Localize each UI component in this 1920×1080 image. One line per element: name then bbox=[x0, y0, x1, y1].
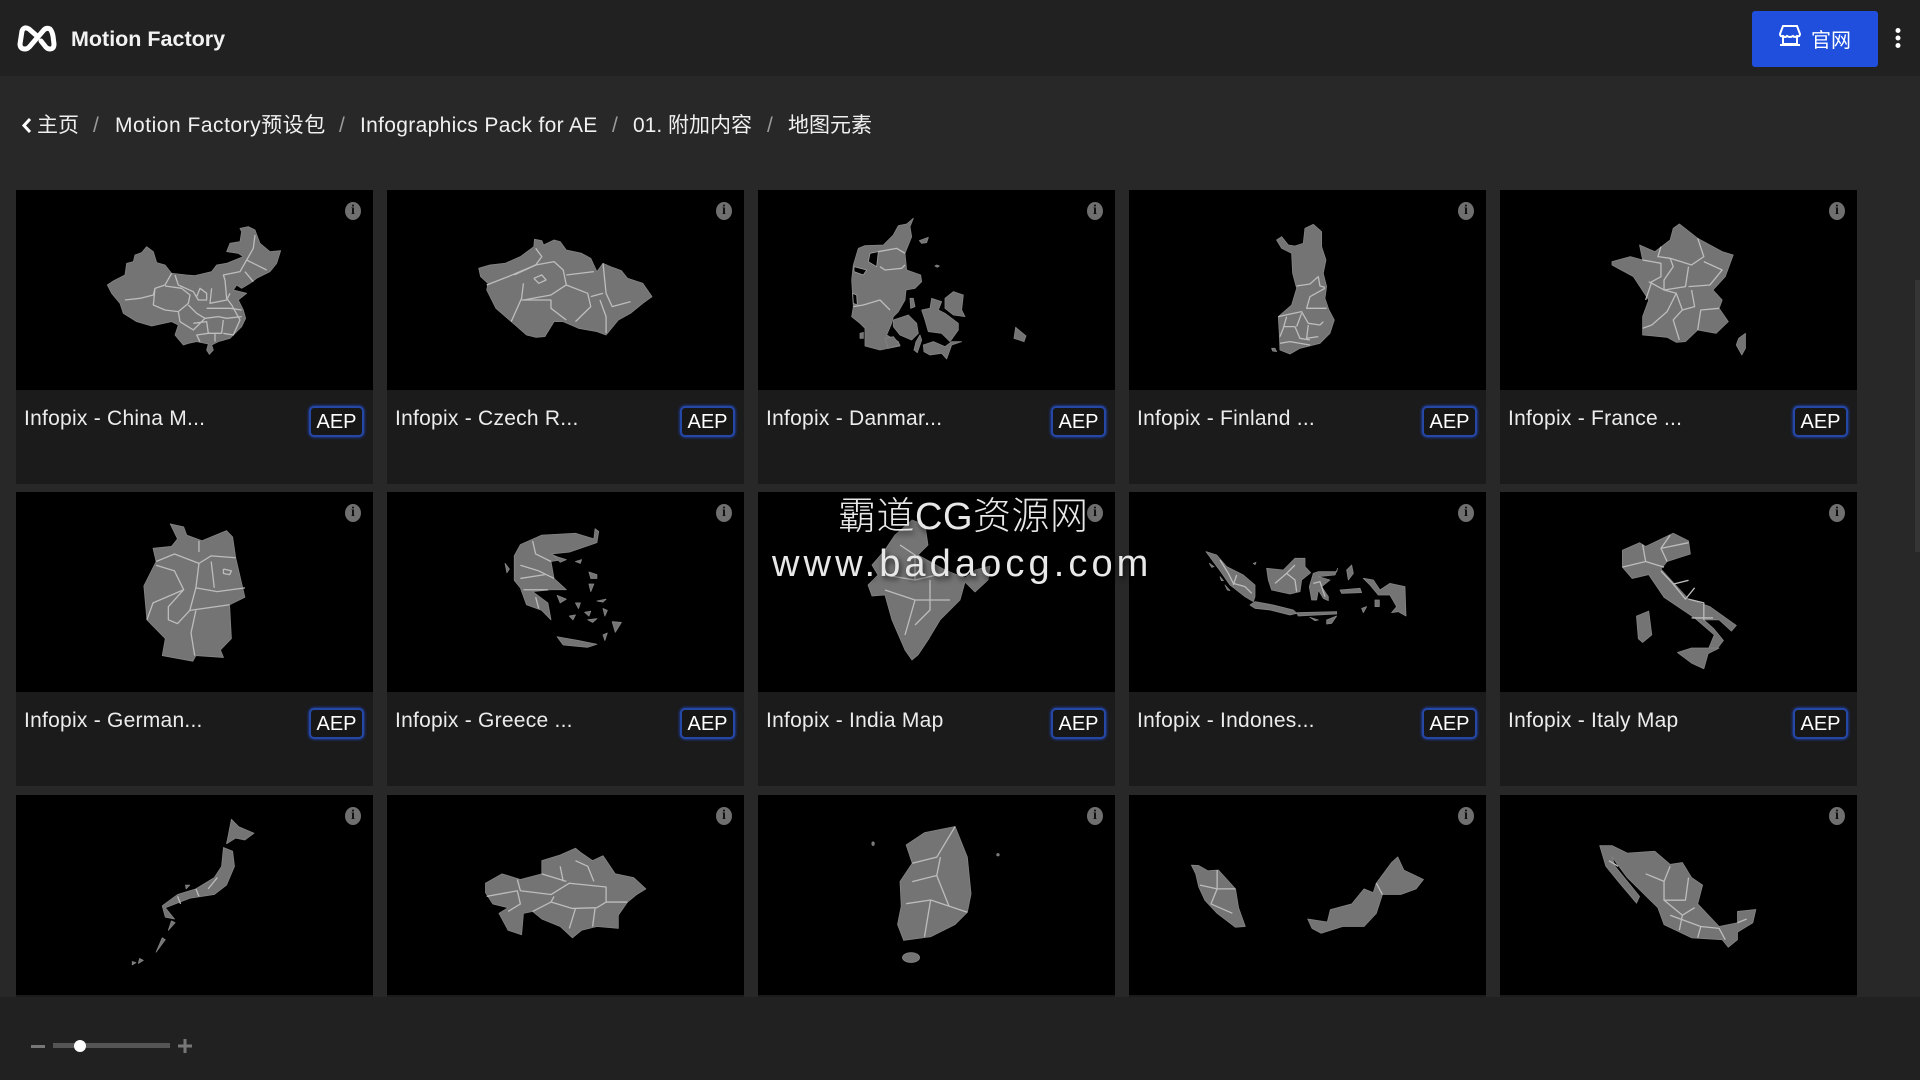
breadcrumb items: / bbox=[93, 114, 99, 137]
icon: info bbox=[1829, 504, 1845, 522]
icon: info: i bbox=[722, 203, 726, 218]
icon: info bbox=[345, 202, 361, 220]
badge: AEP: AEP bbox=[316, 411, 357, 433]
breadcrumb items: / bbox=[612, 114, 618, 137]
badge: AEP: AEP bbox=[1429, 411, 1470, 433]
icon: info: i bbox=[722, 505, 726, 520]
icon: info bbox=[1458, 202, 1474, 220]
breadcrumb navigation bbox=[22, 114, 872, 137]
map: Italy bbox=[1500, 492, 1857, 692]
watermark line: url: www.badaocg.com bbox=[772, 543, 1152, 585]
icon: info: i bbox=[722, 808, 726, 823]
slider thumb bbox=[74, 1040, 86, 1052]
icon: info bbox=[1829, 807, 1845, 825]
scrollbar bbox=[1915, 280, 1920, 552]
badge: AEP: AEP bbox=[687, 713, 728, 735]
card: Malaysia bbox=[1129, 795, 1486, 997]
watermark bbox=[772, 496, 1152, 585]
map: Malaysia bbox=[1129, 795, 1486, 995]
icon: info bbox=[345, 504, 361, 522]
icon: info bbox=[716, 807, 732, 825]
icon: more menu dots bbox=[1896, 28, 1900, 48]
breadcrumb items: 地图元素 bbox=[788, 114, 872, 137]
map: Kazakhstan bbox=[387, 795, 744, 995]
card title: Infopix - Danmar... bbox=[766, 407, 942, 430]
badge: AEP: AEP bbox=[316, 713, 357, 735]
badge: AEP: AEP bbox=[1800, 713, 1841, 735]
badge: AEP bbox=[1051, 708, 1106, 739]
icon: info bbox=[716, 202, 732, 220]
card: Kazakhstan bbox=[387, 795, 744, 997]
map: India bbox=[758, 492, 1115, 692]
icon: info: i bbox=[1093, 808, 1097, 823]
map: France bbox=[1500, 190, 1857, 390]
badge: AEP bbox=[309, 708, 364, 739]
badge: AEP: AEP bbox=[1058, 411, 1099, 433]
breadcrumb items: / bbox=[767, 114, 773, 137]
icon: info: i bbox=[351, 203, 355, 218]
card title: Infopix - France ... bbox=[1508, 407, 1682, 430]
icon: info: i bbox=[1464, 203, 1468, 218]
icon: info: i bbox=[351, 808, 355, 823]
icon: info: i bbox=[351, 505, 355, 520]
map: Mexico bbox=[1500, 795, 1857, 995]
card title: Infopix - German... bbox=[24, 709, 203, 732]
card: China bbox=[16, 190, 373, 484]
badge: AEP bbox=[680, 406, 735, 437]
badge: AEP bbox=[309, 406, 364, 437]
map: Greece bbox=[387, 492, 744, 692]
card: Czech Republic bbox=[387, 190, 744, 484]
breadcrumb items: Infographics Pack for AE bbox=[360, 114, 598, 137]
icon: info bbox=[345, 807, 361, 825]
icon: info bbox=[1458, 504, 1474, 522]
icon: info: i bbox=[1464, 505, 1468, 520]
card: Finland bbox=[1129, 190, 1486, 484]
icon: Motion Factory logo bbox=[18, 25, 56, 52]
card title: Infopix - Indones... bbox=[1137, 709, 1315, 732]
icon: info: i bbox=[1835, 203, 1839, 218]
map: Germany bbox=[16, 492, 373, 692]
icon: info bbox=[1458, 807, 1474, 825]
badge: AEP: AEP bbox=[687, 411, 728, 433]
badge: AEP bbox=[1793, 708, 1848, 739]
card: South Korea bbox=[758, 795, 1115, 997]
map: South Korea bbox=[758, 795, 1115, 995]
icon: back chevron bbox=[22, 118, 31, 133]
badge: AEP bbox=[1793, 406, 1848, 437]
brand name: Motion Factory bbox=[71, 27, 225, 51]
card: Germany bbox=[16, 492, 373, 786]
breadcrumb items bbox=[37, 114, 872, 137]
icon: info bbox=[1087, 504, 1103, 522]
map: Japan bbox=[16, 795, 373, 995]
map: Denmark bbox=[758, 190, 1115, 390]
icon: info: i bbox=[1835, 505, 1839, 520]
card: Indonesia bbox=[1129, 492, 1486, 786]
map: Indonesia bbox=[1129, 492, 1486, 692]
card title: Infopix - Greece ... bbox=[395, 709, 573, 732]
card: India bbox=[758, 492, 1115, 786]
card title: Infopix - Italy Map bbox=[1508, 709, 1678, 732]
icon: info bbox=[1087, 807, 1103, 825]
card: Japan bbox=[16, 795, 373, 997]
icon: info: i bbox=[1835, 808, 1839, 823]
icon: minus bbox=[31, 1044, 45, 1048]
card title: Infopix - Czech R... bbox=[395, 407, 579, 430]
card: France bbox=[1500, 190, 1857, 484]
badge: AEP bbox=[680, 708, 735, 739]
icon: info bbox=[716, 504, 732, 522]
map: Czech Republic bbox=[387, 190, 744, 390]
breadcrumb items: 主页 bbox=[37, 114, 79, 137]
watermark line: site name: 霸道CG资源网 bbox=[838, 496, 1089, 538]
badge: AEP: AEP bbox=[1800, 411, 1841, 433]
badge: AEP bbox=[1422, 406, 1477, 437]
breadcrumb items: Motion Factory预设包 bbox=[115, 114, 326, 137]
icon: info: i bbox=[1093, 505, 1097, 520]
badge: AEP: AEP bbox=[1429, 713, 1470, 735]
card: Denmark bbox=[758, 190, 1115, 484]
badge: AEP: AEP bbox=[1058, 713, 1099, 735]
top header bar bbox=[0, 0, 1920, 76]
card: Italy bbox=[1500, 492, 1857, 786]
icon: info bbox=[1087, 202, 1103, 220]
card: Mexico bbox=[1500, 795, 1857, 997]
zoom slider bbox=[31, 1039, 192, 1053]
button label: 官网 bbox=[1811, 30, 1851, 52]
icon: info: i bbox=[1093, 203, 1097, 218]
icon: info: i bbox=[1464, 808, 1468, 823]
bottom bar bbox=[0, 997, 1920, 1080]
icon: plus bbox=[178, 1039, 192, 1053]
breadcrumb items: 01. 附加内容 bbox=[633, 114, 752, 137]
icon: info bbox=[1829, 202, 1845, 220]
card: Greece bbox=[387, 492, 744, 786]
map: Finland bbox=[1129, 190, 1486, 390]
slider track bbox=[53, 1043, 170, 1048]
badge: AEP bbox=[1051, 406, 1106, 437]
card title: Infopix - China M... bbox=[24, 407, 205, 430]
breadcrumb items: / bbox=[339, 114, 345, 137]
website button bbox=[1752, 11, 1878, 67]
icon: storefront bbox=[1779, 25, 1801, 46]
card title: Infopix - Finland ... bbox=[1137, 407, 1315, 430]
badge: AEP bbox=[1422, 708, 1477, 739]
card title: Infopix - India Map bbox=[766, 709, 944, 732]
map: China bbox=[16, 190, 373, 390]
